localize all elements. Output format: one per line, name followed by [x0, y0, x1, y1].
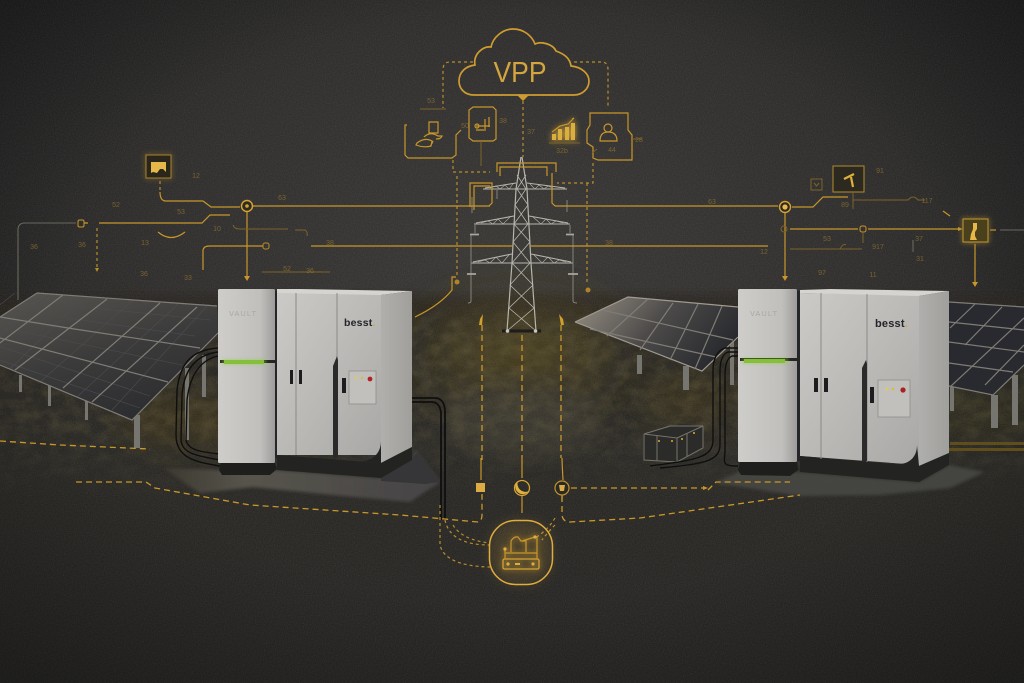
- small reference labels: 63: [708, 199, 716, 206]
- small reference labels: 38: [326, 240, 334, 247]
- network lines: left: [18, 181, 513, 300]
- small reference labels: [30, 98, 933, 282]
- small reference labels: 63: [278, 195, 286, 202]
- small reference labels: 52: [112, 202, 120, 209]
- small reference labels: 117: [921, 198, 933, 205]
- small reference labels: 37: [915, 236, 923, 243]
- small reference labels: 50: [461, 123, 469, 130]
- solar array: right: [949, 302, 1024, 428]
- cables: left: [176, 348, 445, 520]
- battery crates: [643, 424, 703, 462]
- small reference labels: 44: [608, 147, 616, 154]
- small reference labels: 12: [760, 249, 768, 256]
- main cabinet: besst.: [875, 318, 908, 330]
- solar array: right centre: [575, 297, 738, 390]
- icon box: user: [587, 113, 642, 160]
- small reference labels: 91: [876, 168, 884, 175]
- icon: crescent node: [514, 480, 530, 513]
- small reference labels: 28: [635, 137, 643, 144]
- dashed flows on the ground: [0, 441, 800, 567]
- icon box: controls: [469, 107, 496, 166]
- cloud: VPP: [459, 29, 589, 101]
- small reference labels: 36: [306, 268, 314, 275]
- small reference labels: 12: [192, 173, 200, 180]
- cables: right: [650, 348, 738, 468]
- pad shadow: left: [381, 452, 440, 484]
- main cabinet: [797, 289, 949, 482]
- small reference labels: 36: [78, 242, 86, 249]
- small reference labels: 37: [527, 129, 535, 136]
- bracket lines around tower: [415, 163, 590, 317]
- icon box: operator devices: [405, 122, 461, 158]
- small reference labels: 10: [213, 226, 221, 233]
- small reference labels: 53: [427, 98, 435, 105]
- network lines: right: [530, 166, 1024, 287]
- small reference labels: 11: [869, 272, 877, 279]
- small reference labels: 32b: [556, 148, 568, 155]
- small reference labels: 36: [140, 271, 148, 278]
- small reference labels: 38: [605, 240, 613, 247]
- transmission tower: [467, 157, 578, 333]
- small reference labels: 53: [823, 236, 831, 243]
- main cabinet: [275, 289, 412, 478]
- concrete pad: left: [163, 450, 440, 502]
- concrete pad: right: [715, 465, 985, 496]
- solar array: left: [0, 293, 218, 448]
- small reference labels: 33: [184, 275, 192, 282]
- small reference labels: 53: [177, 209, 185, 216]
- main cabinet: besst.: [344, 317, 376, 329]
- vault cabinet: VAULT: [750, 309, 778, 318]
- icon: central inverter badge: [489, 520, 553, 585]
- road stripes: right: [948, 442, 1024, 451]
- vault cabinet: VAULT: [229, 309, 257, 318]
- dashed centre feeders: [479, 314, 564, 480]
- storage unit: right: [738, 289, 949, 482]
- dashed links from cloud: [420, 62, 608, 183]
- icon: square node: [476, 483, 485, 492]
- cloud: VPP: VPP: [494, 57, 546, 89]
- small reference labels: 917: [872, 244, 884, 251]
- small reference labels: 89: [841, 202, 849, 209]
- icon: right key box: [963, 219, 988, 242]
- vault cabinet: [218, 289, 277, 475]
- storage unit: left: [218, 289, 412, 478]
- icon: circle node: [555, 481, 569, 500]
- small reference labels: 38: [499, 118, 507, 125]
- small reference labels: 52: [283, 266, 291, 273]
- small reference labels: 31: [916, 256, 924, 263]
- icon: rising bar chart: [549, 118, 580, 143]
- small reference labels: 97: [818, 270, 826, 277]
- small reference labels: 36: [30, 244, 38, 251]
- vault cabinet: [738, 289, 798, 476]
- icon: left source box: [146, 155, 171, 178]
- small reference labels: 13: [141, 240, 149, 247]
- background: ground: [0, 288, 1024, 496]
